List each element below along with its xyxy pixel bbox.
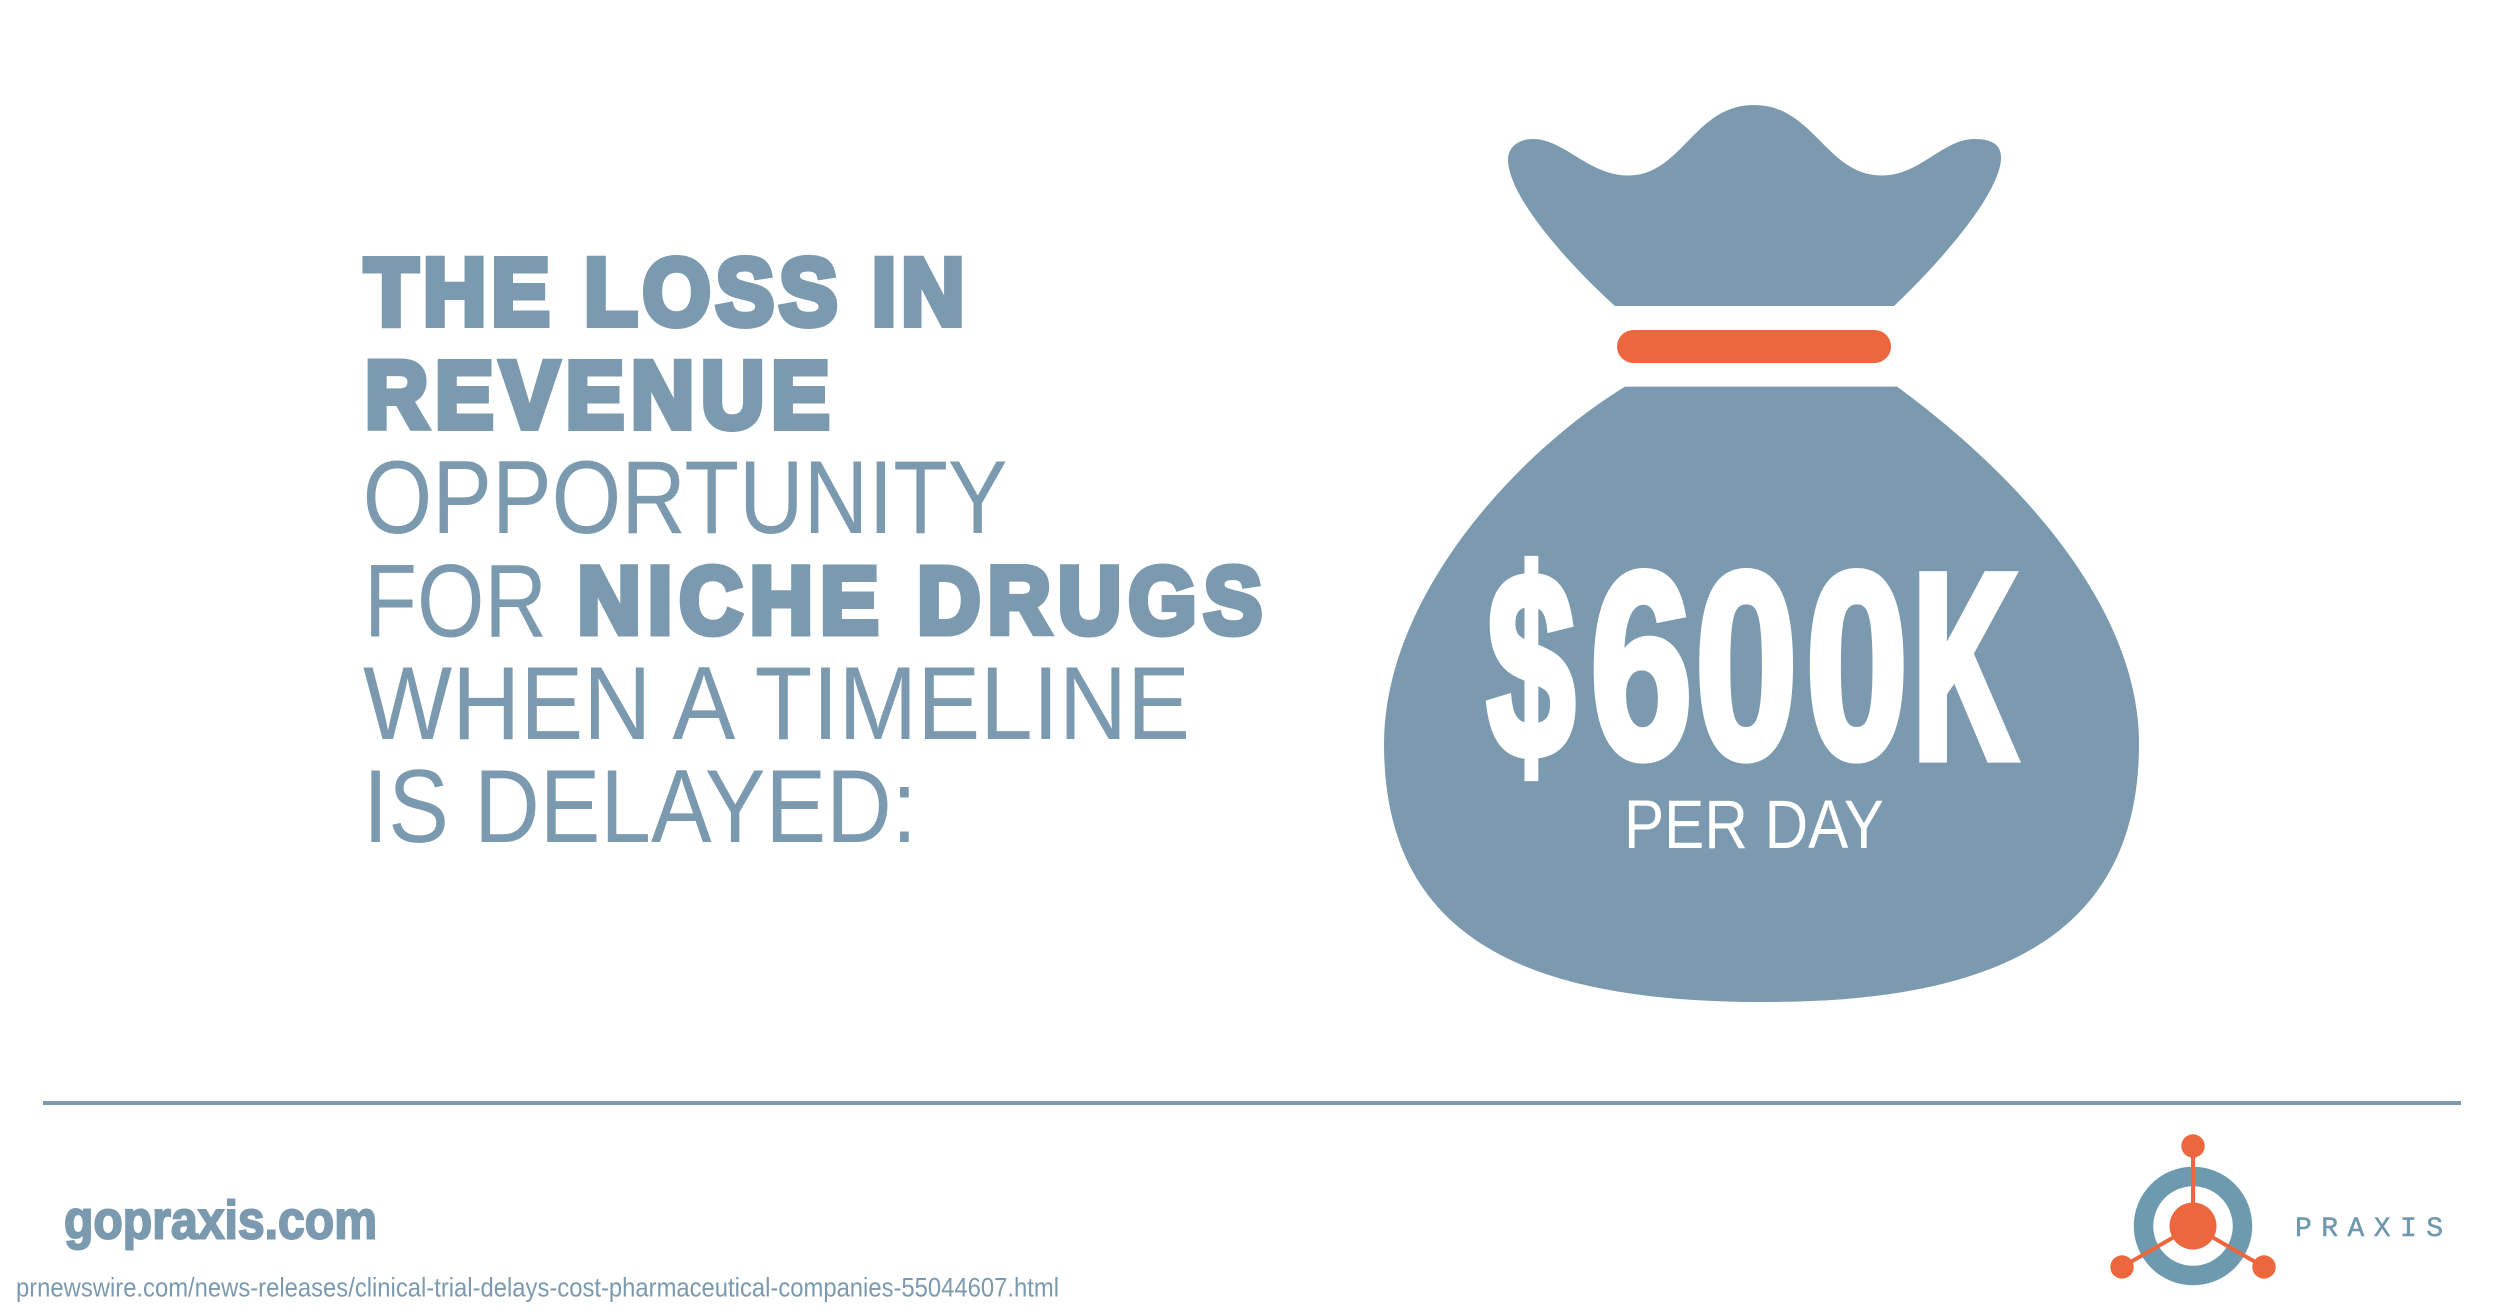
headline line: when a timeline: WHEN A TIMELINE (363, 646, 1190, 762)
value: $600K (1487, 518, 2014, 814)
logo top node (2181, 1134, 2205, 1158)
source citation: prnewswire.com/news-releases/clinical-trial-delays-cost-pharmaceutical-companies-55044607.html (16, 1272, 1059, 1302)
website url: gopraxis.com (64, 1190, 377, 1250)
headline line: is delayed: IS DELAYED: (363, 749, 917, 865)
value dollar sign: $ (1487, 518, 1575, 814)
value unit K: K (1914, 522, 2014, 810)
praxis logo (2110, 1134, 2443, 1279)
logo centre dot (2170, 1202, 2216, 1250)
logo wordmark: PRAXIS (2295, 1214, 2443, 1245)
logo ring (2144, 1176, 2242, 1276)
bag top knot (1508, 105, 2001, 306)
logo left node (2110, 1255, 2134, 1279)
money bag graphic (1384, 105, 2139, 1002)
headline text block (363, 239, 1262, 865)
logo connector lines (2122, 1146, 2264, 1267)
logo right node (2252, 1255, 2276, 1279)
orange tie band (1617, 330, 1891, 363)
headline line: revenue: REVENUE (365, 342, 830, 448)
headline line: for: FOR (364, 544, 547, 660)
label: per day: PER DAY (1624, 786, 1884, 863)
footer divider (43, 1101, 2461, 1105)
headline line: the loss in: THE LOSS IN (365, 239, 964, 345)
headline line: niche drugs: NICHE DRUGS (578, 548, 1262, 654)
bag body (1384, 387, 2139, 1002)
value digits: 600 (1590, 518, 1908, 814)
headline line: opportunity: OPPORTUNITY (363, 440, 1008, 556)
